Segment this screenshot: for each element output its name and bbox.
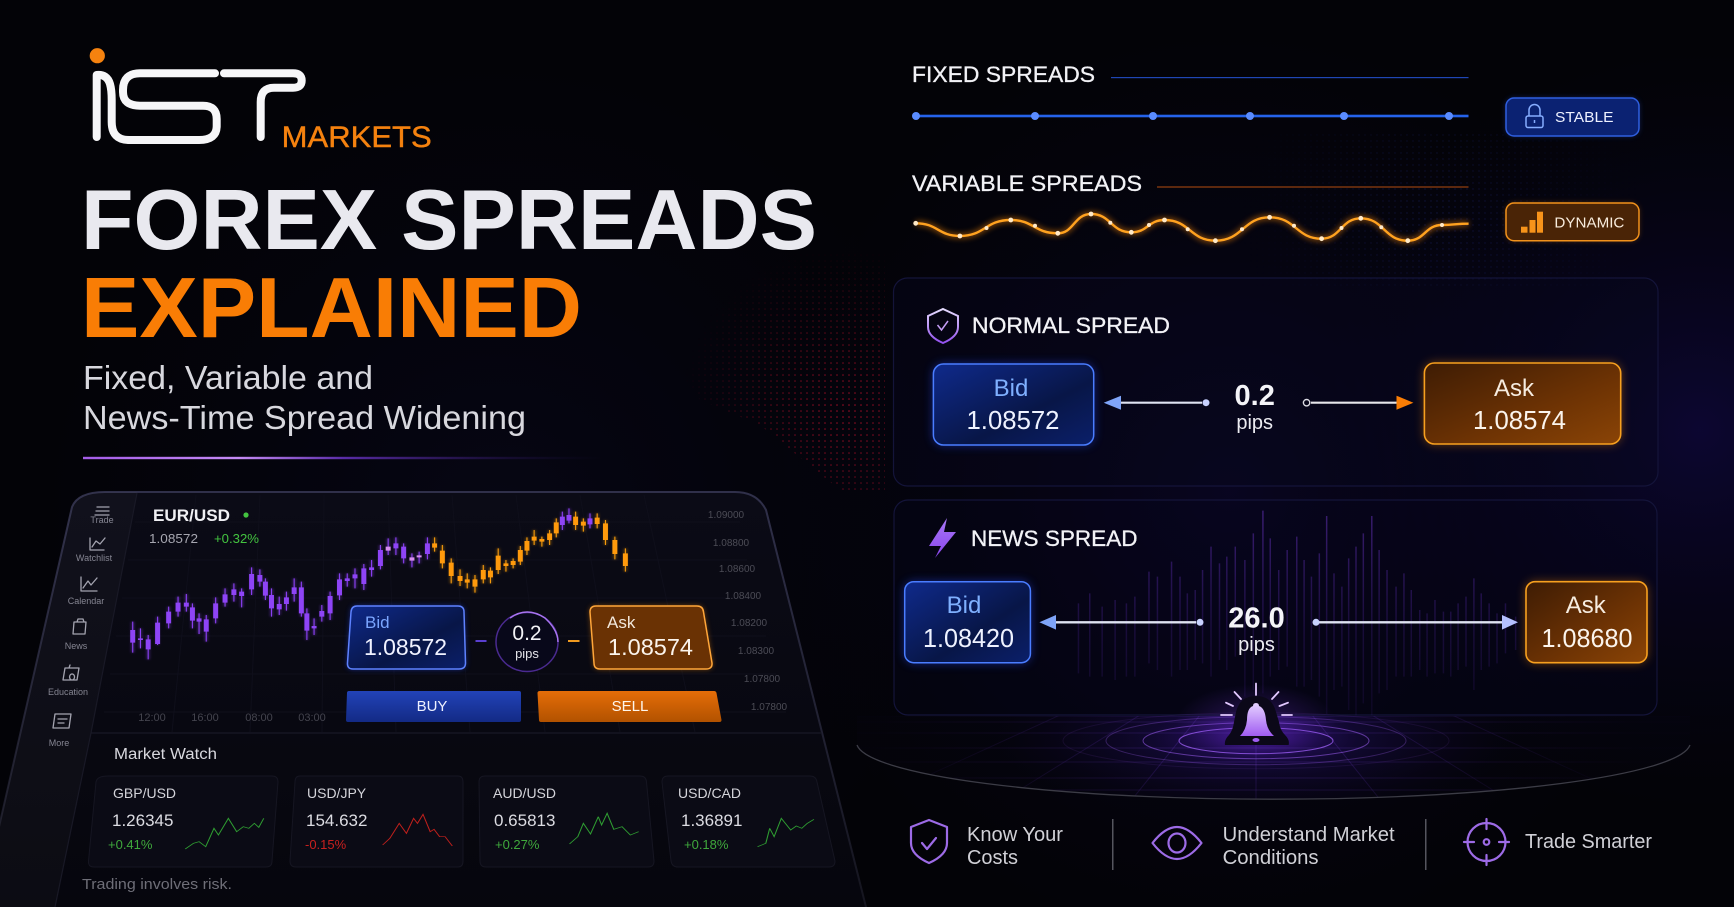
section: fixed spreads — [912, 62, 1639, 136]
badge: dynamic — [1506, 203, 1639, 241]
panel: normal spread — [894, 278, 1658, 486]
ask quote box — [590, 606, 712, 669]
arrow: right to ask — [1303, 396, 1413, 410]
subtitle: News-Time Spread Widening — [83, 399, 526, 436]
sidebar navigation — [48, 507, 114, 748]
icon: news — [73, 619, 86, 634]
price axis: 1.08800 — [713, 538, 750, 549]
title: FOREX SPREADS — [81, 173, 817, 268]
card: USD/JPY — [290, 776, 463, 867]
heading: variable spreads: VARIABLE SPREADS — [912, 171, 1142, 196]
price axis: 1.08200 — [731, 618, 768, 629]
title: EXPLAINED — [81, 261, 582, 356]
sell button — [538, 691, 722, 722]
sidebar navigation: Education — [48, 687, 88, 697]
card: GBP/USD: +0.41% — [108, 837, 153, 852]
spread value: 0.2 — [1235, 380, 1275, 412]
bid box: 1.08572 — [966, 407, 1060, 435]
bid box — [933, 364, 1094, 445]
icon: more — [53, 714, 71, 728]
heading: fixed spreads: FIXED SPREADS — [912, 62, 1095, 87]
pips circle — [496, 612, 558, 672]
title — [81, 173, 817, 356]
time axis: 03:00 — [298, 712, 326, 724]
icon: lock — [1526, 104, 1543, 128]
bid box: Bid — [947, 592, 981, 619]
takeaway: know your costs — [911, 820, 1063, 869]
card: GBP/USD — [88, 776, 278, 867]
heading: news spread: NEWS SPREAD — [971, 526, 1138, 551]
card: GBP/USD: GBP/USD — [113, 785, 176, 801]
ask box: Ask — [1566, 592, 1607, 619]
pair heading: EUR/USD — [153, 506, 230, 525]
ask quote box: Ask — [607, 613, 636, 632]
news platform floor — [850, 713, 1700, 802]
icon: calendar — [81, 577, 97, 591]
time axis: 16:00 — [191, 712, 219, 724]
volatility bars — [1078, 511, 1516, 715]
candlestick chart — [133, 508, 625, 659]
pair heading: +0.32% — [214, 531, 259, 546]
takeaway: understand market conditions — [1152, 824, 1395, 869]
spread value — [1235, 380, 1275, 434]
icon: signal bars — [1521, 212, 1543, 233]
risk disclaimer: Trading involves risk. — [82, 876, 232, 893]
card: USD/JPY: -0.15% — [305, 837, 347, 852]
price axis: 1.08300 — [738, 646, 775, 657]
background — [354, 134, 1734, 692]
logo letterforms IST — [97, 73, 302, 140]
section: variable spreads — [912, 171, 1639, 243]
ask box: Ask — [1494, 375, 1535, 402]
bid box: 1.08420 — [923, 625, 1014, 653]
card: USD/CAD: 1.36891 — [681, 811, 742, 830]
badge: dynamic: DYNAMIC — [1554, 215, 1625, 232]
card: USD/CAD: USD/CAD — [678, 785, 741, 801]
spread value — [1228, 603, 1285, 656]
icon: alert bell — [1176, 684, 1336, 760]
heading: normal spread: NORMAL SPREAD — [972, 313, 1170, 338]
ask quote box: 1.08574 — [608, 634, 693, 660]
icon: education — [63, 665, 79, 680]
arrow: left to bid — [1104, 396, 1210, 410]
takeaway: trade smarter: Trade Smarter — [1525, 831, 1652, 853]
subtitle — [83, 359, 526, 436]
icon: eye — [1152, 827, 1202, 859]
card: AUD/USD — [479, 776, 654, 867]
pips circle: pips — [515, 646, 539, 661]
price axis: 1.09000 — [708, 510, 745, 521]
time axis — [138, 712, 326, 724]
arrow: left to bid — [1039, 615, 1204, 630]
buy button — [346, 691, 521, 722]
ask box: 1.08574 — [1473, 407, 1566, 435]
card: USD/CAD — [662, 776, 835, 867]
card: AUD/USD: AUD/USD — [493, 785, 556, 801]
card: AUD/USD: 0.65813 — [494, 811, 555, 830]
badge: stable — [1506, 98, 1639, 136]
price axis: 1.08600 — [719, 564, 756, 575]
arrow: right to ask — [1312, 615, 1518, 630]
price axis: 1.08400 — [725, 591, 762, 602]
sell button: SELL — [612, 698, 648, 715]
price axis: 1.07800 — [751, 702, 788, 713]
ask box — [1424, 363, 1621, 444]
bid box: Bid — [994, 375, 1028, 402]
sidebar navigation: News — [65, 641, 88, 651]
logo: IST Markets — [90, 48, 432, 154]
spread value: pips — [1236, 412, 1273, 434]
time axis: 08:00 — [245, 712, 273, 724]
price axis — [708, 510, 788, 713]
bid quote box — [347, 606, 466, 669]
card: AUD/USD: +0.27% — [495, 837, 540, 852]
subtitle: Fixed, Variable and — [83, 359, 373, 396]
icon: shield — [928, 309, 958, 343]
icon: target — [1464, 819, 1509, 865]
card: USD/JPY: 154.632 — [306, 811, 367, 830]
pair heading: 1.08572 — [149, 531, 198, 546]
bid quote box: Bid — [365, 613, 390, 632]
takeaway: know your costs: Know Your — [967, 824, 1063, 846]
card: USD/JPY: USD/JPY — [307, 785, 367, 801]
icon: lightning bolt — [929, 518, 956, 558]
ask box — [1526, 582, 1647, 663]
bid quote box: 1.08572 — [364, 634, 447, 660]
card: USD/CAD: +0.18% — [684, 837, 729, 852]
spread value: 26.0 — [1228, 603, 1285, 635]
sidebar navigation: Trade — [90, 515, 114, 525]
takeaway: trade smarter — [1464, 819, 1652, 865]
logo word MARKETS: MARKETS — [282, 121, 432, 154]
sidebar navigation: More — [49, 738, 69, 748]
icon: shield check — [911, 820, 947, 863]
takeaway: know your costs: Costs — [967, 847, 1018, 869]
card: GBP/USD: 1.26345 — [112, 811, 173, 830]
ask box: 1.08680 — [1542, 625, 1632, 653]
pips circle: 0.2 — [512, 622, 542, 645]
icon: trade — [95, 507, 109, 515]
flat spread line — [912, 112, 1468, 120]
sidebar navigation: Calendar — [68, 596, 104, 606]
sidebar navigation: Watchlist — [76, 553, 113, 563]
logo dot — [90, 48, 105, 63]
panel: trading tablet — [0, 492, 868, 907]
pair heading — [149, 506, 259, 546]
wavy spread line — [913, 212, 1469, 243]
panel: news spread — [894, 500, 1657, 715]
bid box — [905, 582, 1030, 663]
buy button: BUY — [417, 698, 447, 715]
price axis: 1.07800 — [744, 674, 781, 685]
takeaway: understand market conditions: Understand Market — [1223, 824, 1395, 846]
badge: stable: STABLE — [1555, 109, 1614, 126]
time axis: 12:00 — [138, 712, 166, 724]
takeaway: understand market conditions: Conditions — [1223, 847, 1319, 869]
spread value: pips — [1238, 634, 1275, 656]
icon: watchlist — [90, 538, 105, 550]
market watch heading: Market Watch — [114, 746, 217, 763]
